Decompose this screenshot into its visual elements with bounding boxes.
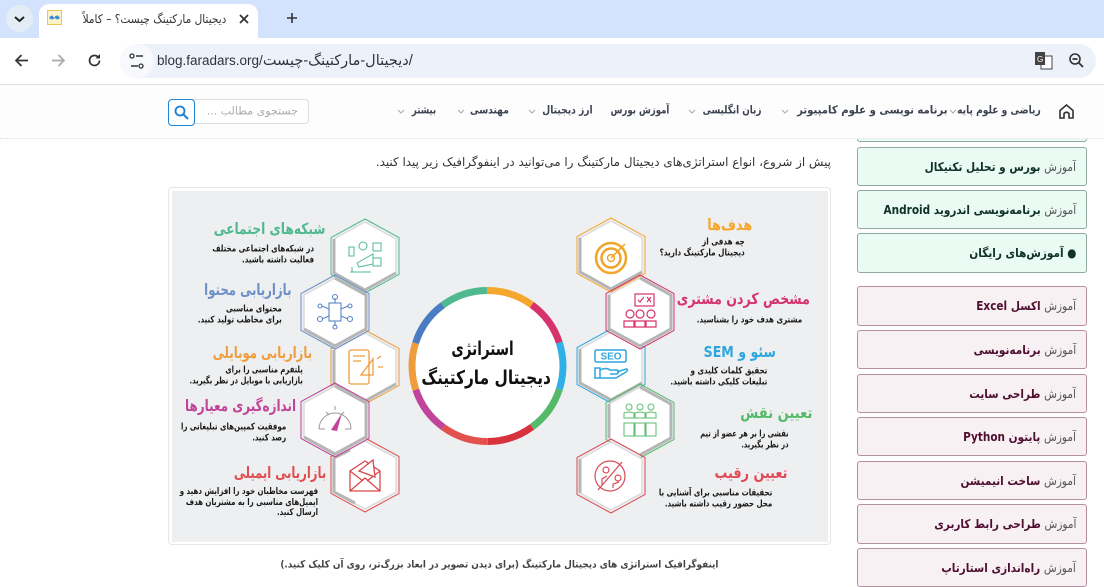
sidebar: UI design: آموزش طراحی رابط کاربری xyxy=(934,517,1076,531)
text: roles: در نظر بگیرید. xyxy=(742,439,789,450)
site navigation bar xyxy=(0,85,1104,139)
active tab xyxy=(39,4,258,38)
text: email marketing: ایمیل‌های مناسبی را به مشتریان هدف xyxy=(186,497,318,508)
forward arrow xyxy=(52,54,65,66)
nav: bourse: آموزش بورس xyxy=(610,104,669,116)
text: SEO and SEM: تحقیق کلمات کلیدی و xyxy=(690,365,767,376)
sidebar: startup: آموزش راه‌اندازی استارتاپ xyxy=(941,560,1076,574)
heading: SEO and SEM: سئو و SEM xyxy=(704,343,776,361)
nav: engineering: مهندسی xyxy=(470,104,509,116)
text: SEO and SEM xyxy=(670,365,767,387)
text: email marketing: ارسال کنید. xyxy=(277,507,318,518)
url: blog.faradars.org/دیجیتال-مارکتینگ-چیست/ xyxy=(157,53,413,69)
nav: english: زبان انگلیسی xyxy=(702,104,761,116)
sidebar: excel: آموزش اکسل Excel xyxy=(976,299,1076,313)
text: content marketing: برای مخاطب تولید کنید. xyxy=(198,314,282,325)
nav: programming: برنامه نویسی و علوم کامپیوتر xyxy=(798,104,948,116)
hexagon: content marketing xyxy=(301,275,369,349)
sidebar: startup xyxy=(857,548,1087,587)
favicon xyxy=(47,10,62,25)
search placeholder: جستجوی مطالب ... xyxy=(207,104,298,118)
tab search button xyxy=(6,5,33,32)
heading: competitor: تعیین رقیب xyxy=(714,464,787,482)
browser tab strip xyxy=(0,0,1104,38)
text: metrics: رصد کنید. xyxy=(252,432,286,443)
text: competitor xyxy=(659,486,772,509)
text: metrics xyxy=(181,421,286,443)
sidebar partial box xyxy=(857,139,1087,142)
search button xyxy=(168,99,195,126)
address bar xyxy=(120,44,1096,78)
text: define customer: مشتری هدف خود را بشناسید. xyxy=(697,315,802,326)
tab title: دیجیتال مارکتینگ چیست؟ – کاملاً xyxy=(82,12,226,26)
heading: email marketing: بازاریابی ایمیلی xyxy=(234,464,326,482)
text: email marketing: فهرست مخاطبان خود را افزایش دهید و xyxy=(180,486,318,497)
text: content marketing: محتوای مناسبی xyxy=(226,303,282,314)
sidebar: free courses xyxy=(857,233,1087,273)
nav: more: بیشتر xyxy=(412,104,436,116)
text: mobile marketing: بازاریابی با موبایل در نظر بگیرید. xyxy=(190,375,303,386)
nav: crypto: ارز دیجیتال xyxy=(543,104,593,116)
sidebar: android: آموزش برنامه‌نویسی اندروید Android xyxy=(883,202,1076,216)
reload icon xyxy=(88,54,100,66)
nav chevrons xyxy=(398,110,956,114)
sidebar: web design: آموزش طراحی سایت xyxy=(969,386,1076,400)
sidebar: bourse xyxy=(857,147,1087,186)
tab close xyxy=(239,14,249,24)
text: metrics: موفقیت کمپین‌های تبلیغاتی را xyxy=(181,421,286,432)
hexagon: roles xyxy=(606,384,674,458)
text: competitor: تحقیقات مناسبی برای آشنایی با xyxy=(659,487,772,498)
text: email marketing xyxy=(179,486,318,518)
text: social networks xyxy=(212,243,314,265)
heading: roles: تعیین نقش xyxy=(740,404,812,422)
sidebar: programming xyxy=(857,330,1087,369)
sidebar: python xyxy=(857,417,1087,456)
sidebar: UI design xyxy=(857,504,1087,544)
infographic background xyxy=(172,191,828,542)
text: social networks: فعالیت داشته باشید. xyxy=(242,254,314,265)
new tab plus xyxy=(287,13,297,23)
text: goals: دیجیتال مارکتینگ دارید؟ xyxy=(660,247,745,258)
infographic frame xyxy=(168,187,831,545)
site controls xyxy=(120,44,154,78)
sidebar: excel xyxy=(857,286,1087,326)
search box xyxy=(168,99,309,124)
heading: metrics: اندازه‌گیری معیارها xyxy=(185,397,296,415)
heading: mobile marketing: بازاریابی موبایلی xyxy=(213,344,312,362)
hexagon: SEO xyxy=(577,329,645,403)
hexagon: metrics xyxy=(301,383,369,457)
sidebar: animation xyxy=(857,461,1087,500)
text: competitor: محل حضور رقیب داشته باشید. xyxy=(665,498,772,509)
center title line 2: دیجیتال مارکتینگ xyxy=(421,367,551,389)
text: roles: نقشی را بر هر عضو از تیم xyxy=(701,428,789,439)
sidebar: python: آموزش پایتون Python xyxy=(963,430,1076,444)
text: mobile marketing xyxy=(190,364,303,386)
caption: اینفوگرافیک استراتژی های دیجیتال مارکتینگ (برای دیدن تصویر در ابعاد بزرگ‌تر، روی آن کلیک کنید.) xyxy=(280,560,718,570)
hexagon: social networks xyxy=(331,219,399,293)
center circle xyxy=(412,290,564,442)
text: goals: چه هدفی از xyxy=(702,236,745,247)
text: goals xyxy=(660,236,745,258)
sidebar: bourse: آموزش بورس و تحلیل تکنیکال xyxy=(925,160,1076,174)
heading: goals: هدف‌ها xyxy=(707,216,752,234)
hexagon: mobile marketing xyxy=(331,330,399,404)
translate icon xyxy=(1035,52,1052,70)
text: SEO and SEM: تبلیغات کلیکی داشته باشید. xyxy=(670,376,767,387)
zoom icon xyxy=(1069,53,1084,68)
sidebar: programming: آموزش برنامه‌نویسی xyxy=(973,342,1076,356)
sidebar: free courses: ● آموزش‌های رایگان xyxy=(969,246,1076,260)
hexagon: define customer xyxy=(606,275,674,349)
hexagon: competitor xyxy=(577,439,645,513)
nav: math: ریاضی و علوم پایه xyxy=(957,104,1041,116)
heading: content marketing: بازاریابی محتوا xyxy=(204,281,291,299)
center title line 1: استراتژی xyxy=(452,338,514,360)
translate icon: G xyxy=(1037,55,1043,64)
text: mobile marketing: پلتفرم مناسبی را برای xyxy=(226,364,303,375)
hexagon: goals xyxy=(577,218,645,292)
browser toolbar xyxy=(0,38,1104,85)
text: social networks: در شبکه‌های اجتماعی مختلف xyxy=(212,243,314,254)
sidebar: animation: آموزش ساخت انیمیشن xyxy=(961,474,1076,488)
text: roles xyxy=(700,428,789,450)
hexagon: SEO: SEO xyxy=(600,352,622,362)
heading: social networks: شبکه‌های اجتماعی xyxy=(213,220,325,238)
icon: home xyxy=(1059,104,1074,119)
text: content marketing xyxy=(198,303,282,325)
sidebar: android xyxy=(857,190,1087,229)
sidebar: web design xyxy=(857,374,1087,413)
hexagon: email marketing xyxy=(331,438,399,512)
intro paragraph: پیش از شروع، انواع استراتژی‌های دیجیتال مارکتینگ را می‌توانید در اینفوگرافیک زیر پیدا کنید. xyxy=(376,155,831,169)
back arrow xyxy=(14,54,28,67)
heading: define customer: مشخص کردن مشتری xyxy=(677,290,810,308)
